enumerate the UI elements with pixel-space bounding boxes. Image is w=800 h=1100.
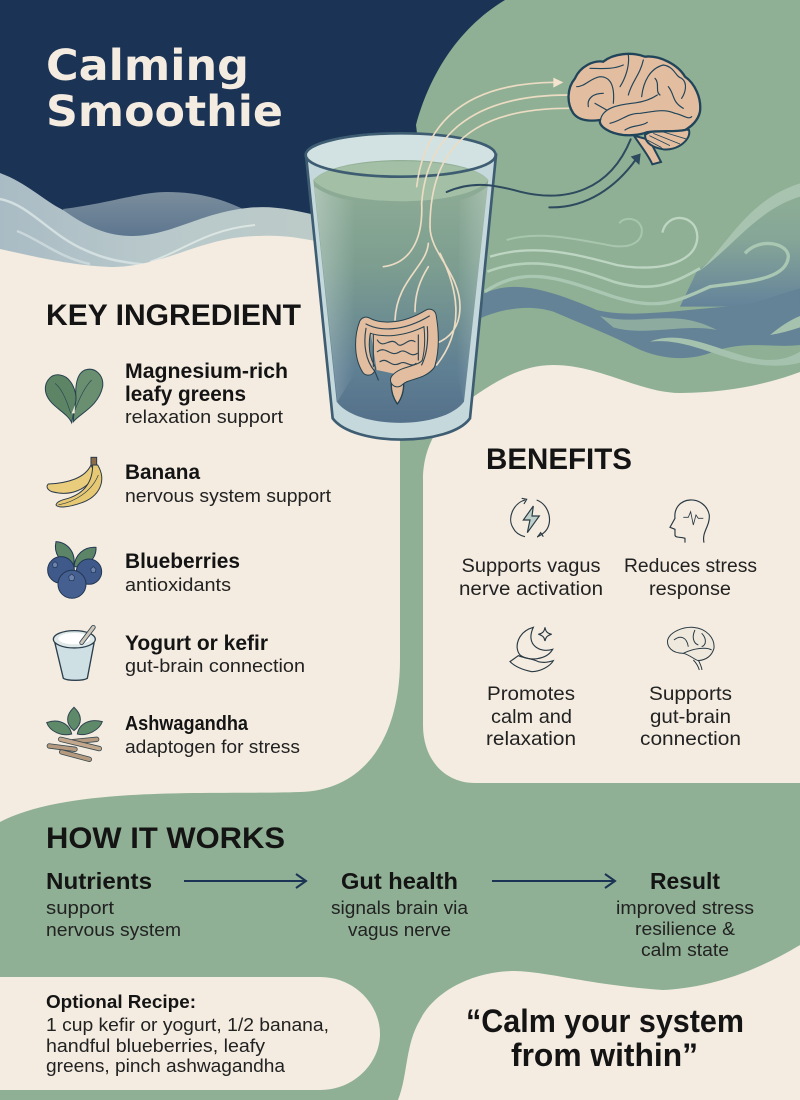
step: nutrients: support [46, 897, 114, 918]
heading: key ingredient: KEY INGREDIENT [46, 299, 301, 332]
icon: ashwagandha [47, 707, 102, 759]
panel: optional recipe: handful blueberries, leafy [46, 1036, 265, 1056]
step: gut health: signals brain via [331, 897, 469, 918]
icon: outline brain [668, 627, 714, 670]
step: gut health: vagus nerve [348, 919, 451, 940]
text: gut-brain: Supports [649, 683, 732, 705]
icon: moon in hand [510, 627, 553, 672]
step: result: calm state [641, 939, 729, 960]
glass of smoothie [306, 78, 641, 440]
icon: banana [47, 457, 102, 507]
icon: head with pulse [670, 500, 709, 543]
panel: optional recipe: Optional Recipe: [46, 992, 196, 1012]
flowing waves right [480, 183, 800, 366]
heading: how it works: HOW IT WORKS [46, 822, 285, 855]
text: yogurt: gut-brain connection [125, 655, 305, 676]
text: leafy greens: Magnesium-rich [125, 360, 288, 383]
rim opening [306, 133, 496, 177]
arrow: nutrients to gut health [184, 874, 306, 888]
panel: optional recipe [0, 977, 380, 1090]
rim [306, 133, 496, 177]
title [46, 41, 283, 137]
liquid side highlights [314, 187, 355, 402]
icon: vagus lightning [511, 498, 550, 537]
dark arrows to brain [447, 139, 641, 207]
liquid [313, 160, 488, 423]
text: gut-brain: gut-brain [650, 706, 731, 728]
text: gut-brain: connection [640, 728, 741, 750]
panel: quote [398, 945, 800, 1100]
icon: blueberries [48, 542, 102, 598]
text: gut-brain [640, 683, 741, 750]
text: blueberries: antioxidants [125, 574, 231, 595]
text: vagus [459, 555, 603, 600]
panel: key ingredient background [0, 236, 400, 822]
text: stress: response [649, 578, 731, 600]
text: calm: Promotes [487, 683, 575, 705]
text: ashwagandha: adaptogen for stress [125, 736, 300, 757]
text: stress: Reduces stress [624, 555, 757, 577]
text: leafy greens [125, 360, 288, 427]
step: nutrients: nervous system [46, 919, 181, 940]
heading: benefits: BENEFITS [486, 443, 632, 476]
glass body [306, 155, 496, 440]
left wave band [0, 173, 320, 285]
step: nutrients [46, 868, 181, 940]
panel: benefits background [423, 365, 800, 783]
text: blueberries: Blueberries [125, 550, 240, 573]
title: Smoothie [46, 87, 283, 137]
icon: brain [569, 54, 700, 164]
step: result: improved stress [616, 897, 754, 918]
text: leafy greens: relaxation support [125, 406, 283, 427]
text: stress [624, 555, 757, 600]
step: result: Result [650, 868, 720, 894]
icon: leafy greens [45, 369, 103, 423]
step: result: resilience & [635, 918, 736, 939]
text: yogurt [125, 632, 305, 676]
text: blueberries [125, 550, 240, 595]
nerves to brain [383, 78, 568, 365]
icon: yogurt cup [53, 627, 95, 680]
navy header shape [0, 0, 505, 240]
text: yogurt: Yogurt or kefir [125, 632, 268, 655]
panel: quote: from within” [511, 1037, 698, 1073]
text: ashwagandha [125, 713, 300, 757]
text: calm: relaxation [486, 728, 576, 750]
text: vagus: nerve activation [459, 578, 603, 600]
text: banana: nervous system support [125, 485, 331, 506]
panel: optional recipe: greens, pinch ashwagandha [46, 1056, 286, 1076]
panel: optional recipe: 1 cup kefir or yogurt, 1/2 banana, [46, 1015, 329, 1035]
icon: intestine [362, 316, 431, 404]
step: nutrients: Nutrients [46, 868, 152, 894]
text: vagus: Supports vagus [462, 555, 601, 577]
text: ashwagandha: Ashwagandha [125, 713, 249, 735]
title: Calming [46, 41, 249, 91]
panel: quote: “Calm your system [466, 1003, 744, 1039]
step: gut health: Gut health [341, 868, 458, 894]
text: calm: calm and [491, 706, 572, 728]
arrow: gut health to result [492, 874, 615, 888]
text: banana [125, 461, 331, 506]
text: calm [486, 683, 576, 750]
liquid surface [313, 161, 488, 201]
text: banana: Banana [125, 461, 200, 484]
text: leafy greens: leafy greens [125, 383, 246, 406]
step: result [616, 868, 754, 960]
step: gut health [331, 868, 469, 940]
